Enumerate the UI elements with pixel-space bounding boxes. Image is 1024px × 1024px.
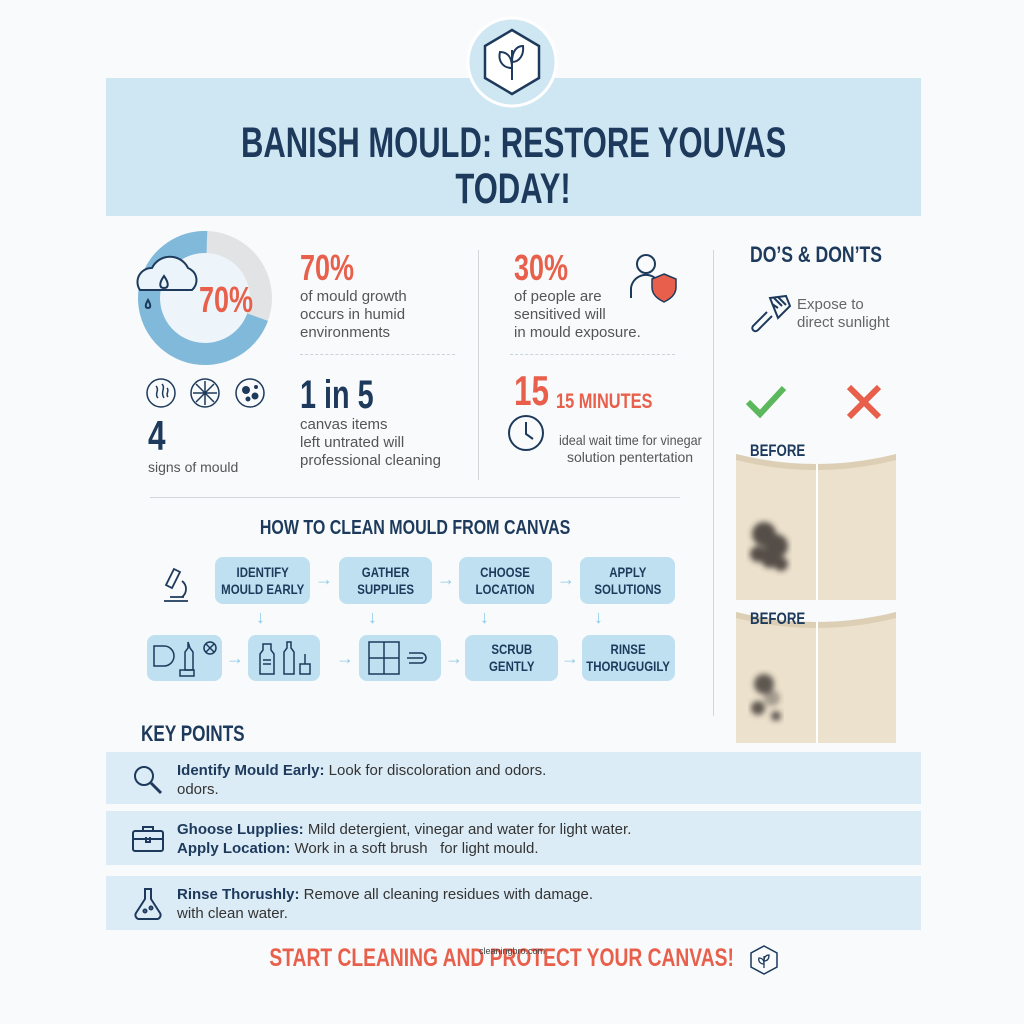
flow chart: IDENTIFY [236, 564, 289, 580]
stat: 70% humid: environments [300, 324, 390, 341]
stat: 4 signs: signs of mould [148, 459, 238, 475]
icon: clock [508, 415, 544, 451]
flow chart: RINSE [611, 641, 646, 657]
icon: brush [751, 294, 792, 332]
flow chart [147, 557, 675, 681]
stat: 4 signs: 4 [148, 412, 166, 459]
stat: 1 in 5: canvas items [300, 416, 388, 433]
key point 2 [106, 811, 921, 865]
key point 3 [106, 876, 921, 930]
flow chart: MOULD EARLY [221, 580, 304, 596]
stat: 70% humid: 70% [300, 247, 354, 288]
flow chart: ↓ [594, 607, 603, 627]
key point 2: Ghoose Lupplies: Mild detergient, vinegar and water for light water. [177, 821, 631, 838]
flow chart: CHOOSE [481, 564, 530, 580]
key point 1: Identify Mould Early: Look for discoloration and odors. [177, 762, 546, 779]
flow chart: SUPPLIES [357, 580, 414, 596]
stat: 70% humid [300, 247, 407, 341]
text: wait time: ideal wait time for vinegar [559, 432, 701, 448]
text: wait time: solution pentertation [567, 449, 693, 465]
flow chart: GENTLY [489, 658, 534, 674]
heading: how to clean: HOW TO CLEAN MOULD FROM CANVAS [260, 517, 570, 539]
icons: signs of mould [146, 378, 265, 408]
icon: cross [846, 384, 882, 420]
panel: do's & don'ts [736, 242, 896, 743]
key point 1 [106, 752, 921, 804]
stat: 15 minutes: 15 MINUTES [556, 390, 652, 413]
text: wait time [559, 432, 702, 465]
before image 1 [736, 454, 896, 600]
flow chart: ↓ [368, 607, 377, 627]
stat: 30% people: 30% [514, 247, 568, 288]
title banner [106, 78, 921, 216]
key point 2: Apply Location: Work in a soft brush for light mould. [177, 840, 538, 857]
footer call to action: START CLEANING AND PROTECT YOUR CANVAS! [270, 944, 734, 972]
icon: footer hexagon [750, 945, 778, 975]
donut chart 70% [136, 231, 272, 365]
stat: 30% people: in mould exposure. [514, 324, 641, 341]
flow chart: → [226, 648, 244, 668]
stat: 1 in 5: left untrated will [300, 434, 404, 451]
flow chart: → [445, 648, 463, 668]
stat: 30% people: of people are [514, 288, 602, 305]
icon: person with shield [630, 254, 677, 303]
title: TODAY! [456, 165, 571, 213]
panel: do's & don'ts: BEFORE [750, 609, 805, 628]
key point 1: odors. [177, 781, 219, 798]
watermark: cleaningbro.com [479, 946, 545, 956]
title [241, 119, 786, 213]
flow chart: ↓ [480, 607, 489, 627]
stat: 1 in 5: 1 in 5 [300, 373, 374, 417]
stat: 15 minutes: 15 [514, 367, 549, 414]
flow chart: APPLY [609, 564, 646, 580]
flow chart: → [557, 569, 575, 589]
heading: key points: KEY POINTS [141, 721, 245, 746]
key point 3: Rinse Thorushly: Remove all cleaning residues with damage. [177, 886, 593, 903]
text: expose [797, 296, 890, 331]
text: expose: direct sunlight [797, 314, 890, 331]
stat: 15 minutes [514, 367, 652, 414]
flow chart: → [315, 569, 333, 589]
flow chart: → [336, 648, 354, 668]
flow chart: GATHER [362, 564, 409, 580]
stat: 30% people [514, 247, 641, 341]
flow chart: SCRUB [491, 641, 532, 657]
before image 2 [736, 612, 896, 743]
heading: DO’S & DON’TS [750, 242, 882, 267]
icon: check [746, 386, 786, 418]
icon: microscope [164, 568, 188, 602]
flow chart: → [437, 569, 455, 589]
flow chart: ↓ [256, 607, 265, 627]
stat: 30% people: sensitived will [514, 306, 606, 323]
donut chart 70%: 70% [199, 279, 253, 320]
flow chart: THORUGUGILY [587, 658, 670, 674]
stat: 70% humid: occurs in humid [300, 306, 405, 323]
title: BANISH MOULD: RESTORE YOUVAS [241, 119, 786, 167]
stat: 1 in 5 [300, 373, 441, 469]
flow chart: → [561, 648, 579, 668]
flow chart: LOCATION [476, 580, 535, 596]
stat: 1 in 5: professional cleaning [300, 452, 441, 469]
key point 3: with clean water. [177, 905, 288, 922]
logo: hexagon leaf [470, 20, 554, 108]
flow chart: SOLUTIONS [594, 580, 661, 596]
stat: 70% humid: of mould growth [300, 288, 407, 305]
panel: do's & don'ts: BEFORE [750, 441, 805, 460]
text: expose: Expose to [797, 296, 864, 313]
stat: 4 signs [148, 412, 238, 475]
